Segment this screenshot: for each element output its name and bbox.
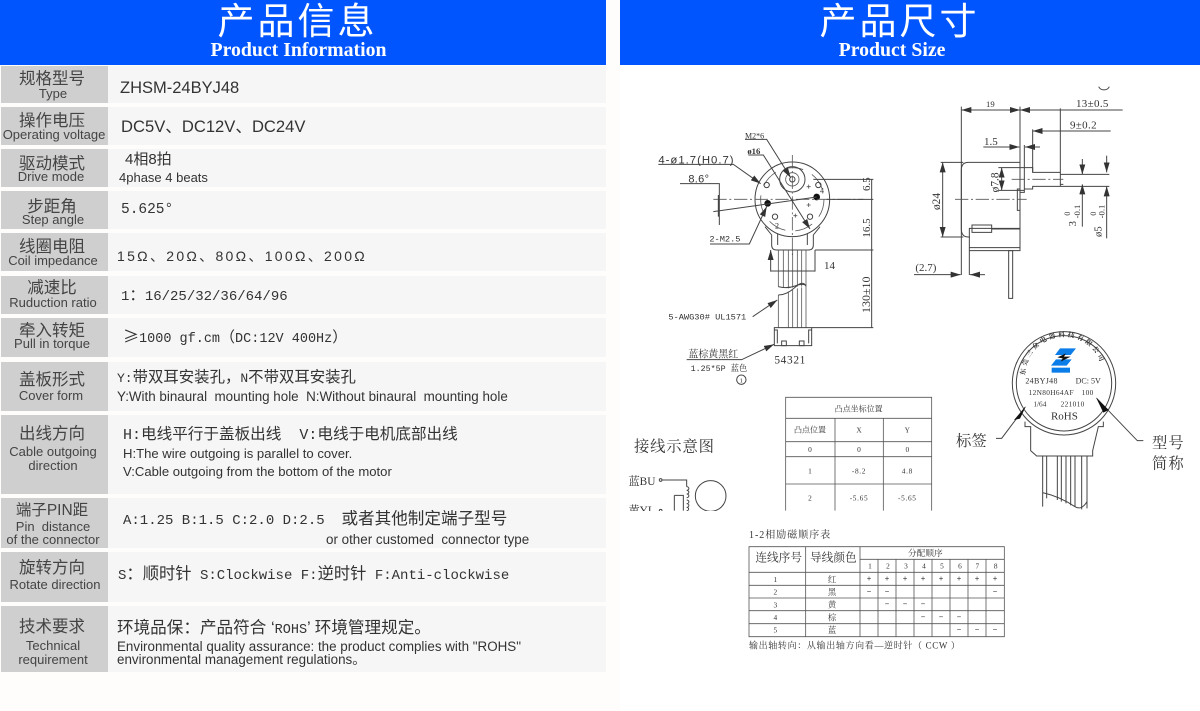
table: bump coordinates — [786, 397, 932, 511]
drawing: motor side view: 3 — [1068, 221, 1079, 226]
table: excitation sequence: − — [903, 600, 908, 609]
drawing: motor label view: 标签 — [956, 433, 987, 450]
value: cable outgoing direction: H:The wire outgoing is parallel to cover. — [123, 446, 352, 461]
drawing: motor label view: 简称 — [1152, 456, 1185, 473]
label: drive mode: 驱动模式 — [19, 155, 85, 173]
value: technical requirement: 环境品保：产品符合 ‘ROHS’ 环境管理规定。 — [117, 618, 431, 638]
table: excitation sequence: − — [975, 625, 980, 634]
labels: M2*6 — [745, 131, 764, 140]
label: pin distance — [1, 498, 108, 548]
table: excitation sequence: 黄 — [828, 600, 837, 610]
drawing: motor side view: ø24 — [931, 193, 943, 210]
drawing: motor front view: 54321 — [774, 354, 806, 366]
row: cable outgoing direction — [1, 415, 606, 494]
row: rotate direction — [1, 552, 606, 602]
heading: english size subtitle: Product Size — [839, 39, 945, 61]
label: cable outgoing direction — [1, 415, 108, 494]
table: excitation sequence: − — [939, 612, 944, 621]
row: pull in torque — [1, 318, 606, 357]
label: rotate direction: Rotate direction — [9, 577, 101, 592]
label: coil impedance — [1, 233, 108, 271]
table: excitation sequence: 1-2相励磁顺序表 — [749, 528, 831, 541]
table: excitation sequence: + — [921, 574, 926, 583]
table: excitation sequence: 5 — [940, 561, 944, 570]
drawing: motor front view: 1.25*5P 蓝色 — [691, 363, 747, 374]
table: excitation sequence: 黑 — [828, 588, 837, 597]
value: technical requirement: environmental management regulations。 — [117, 652, 366, 667]
label: drive mode: Drive mode — [18, 169, 84, 184]
table: bump coordinates: -5.65 — [850, 494, 868, 503]
label: technical requirement: requirement — [18, 652, 88, 667]
drawing: motor side view: ø5 — [1093, 226, 1104, 237]
table: excitation sequence: 2 — [886, 561, 890, 570]
drawing: motor side view: ø7.8 — [990, 172, 1002, 192]
drawing: motor label view: 型号 — [1152, 434, 1185, 452]
label: type: Type — [39, 86, 67, 101]
value: cable outgoing direction: H:电线平行于盖板出线 V:电线于电机底部出线 — [123, 422, 458, 444]
value: cable outgoing direction: V:Cable outgoing from the bottom of the motor — [123, 464, 392, 479]
table: excitation sequence: 红 — [828, 574, 837, 584]
label: cable outgoing direction: direction — [28, 458, 78, 473]
row: type — [1, 66, 606, 103]
value: pull in torque: ≥1000 gf.cm（DC:12V 400Hz） — [123, 323, 347, 347]
label: technical requirement: 技术要求 — [19, 618, 85, 636]
table: excitation sequence: 5 — [773, 626, 777, 635]
table: excitation sequence: − — [885, 600, 890, 609]
value: cover form: Y:With binaural mounting hole N:Without binaural mounting hole — [117, 389, 508, 404]
value: pin distance: or other customed connector type — [326, 532, 529, 547]
heading: english subtitle: Product Information — [210, 39, 386, 61]
drawing: motor side view: 13±0.5 — [1076, 98, 1109, 110]
drawing: motor side view: 1.5 — [984, 136, 998, 148]
drawing: motor label view: 东莞三众电器科技有限公司 — [1020, 331, 1104, 376]
label: technical requirement: Technical — [26, 638, 80, 653]
value: drive mode — [119, 151, 208, 185]
row: drive mode — [1, 149, 606, 187]
label: pin distance: Pin distance — [16, 519, 90, 534]
drawing: motor side view: 9±0.2 — [1070, 119, 1097, 131]
panel: product size drawings — [620, 65, 1200, 711]
value: reduction ratio: 1：16/25/32/36/64/96 — [121, 283, 288, 305]
table: excitation sequence: 7 — [975, 561, 979, 570]
value: rotate direction: S：顺时针 S:Clockwise F:逆时针 F:Anti-clockwise — [118, 560, 509, 584]
label: drive mode — [1, 149, 108, 187]
row: operating voltage — [1, 107, 606, 145]
dimension leaders — [658, 139, 873, 328]
drawing: motor label view: 1/64 — [1033, 400, 1047, 409]
table: bump coordinates: -5.65 — [898, 494, 917, 503]
row: coil impedance — [1, 233, 606, 271]
table: excitation sequence: + — [867, 574, 872, 583]
table: excitation sequence: 6 — [958, 561, 962, 570]
value: cover form: Y:带双耳安装孔，N不带双耳安装孔 — [117, 365, 356, 387]
table: excitation sequence — [749, 528, 1004, 650]
label: step angle: 步距角 — [27, 198, 77, 216]
row: step angle — [1, 191, 606, 229]
label: coil impedance: 线圈电阻 — [19, 238, 85, 256]
value: technical requirement — [117, 618, 521, 667]
label: reduction ratio: Ruduction ratio — [9, 295, 97, 310]
table: excitation sequence: + — [957, 574, 962, 583]
drawing: motor label view: 100 — [1082, 388, 1094, 397]
label: pull in torque: Pull in torque — [14, 336, 90, 351]
value: type: ZHSM-24BYJ48 — [120, 79, 239, 97]
drawing: motor label view — [956, 331, 1185, 510]
value: coil impedance: 15Ω、20Ω、80Ω、100Ω、200Ω — [117, 248, 367, 264]
table: excitation sequence: + — [939, 574, 944, 583]
table: excitation sequence: 导线颜色 — [810, 551, 857, 565]
drawing: wiring diagram: 蓝BU — [628, 474, 655, 488]
drawing: motor label view: 12N80H64AF — [1029, 388, 1074, 397]
label: operating voltage — [1, 107, 108, 145]
table: bump coordinates: 2 — [808, 494, 812, 503]
drawing: motor front view: 130±10 — [859, 276, 873, 313]
value: step angle: 5.625° — [121, 202, 173, 218]
drawing: motor label view: RoHS — [1051, 410, 1078, 422]
table: bump coordinates: 4.8 — [902, 466, 913, 475]
table: bump coordinates: 0 — [808, 445, 812, 454]
drawing: motor side view — [914, 87, 1123, 298]
drawing: motor front view: 2-M2.5 — [709, 235, 741, 245]
table: excitation sequence: 1 — [773, 575, 777, 584]
value: pin distance: A:1.25 B:1.5 C:2.0 D:2.5 或者其他制定端子型号 — [123, 505, 507, 529]
label: cover form: 盖板形式 — [19, 371, 85, 389]
table: excitation sequence: 4 — [773, 613, 777, 622]
label: cable outgoing direction: 出线方向 — [19, 425, 85, 443]
table: bump coordinates: Y — [905, 426, 911, 435]
table: excitation sequence: 连线序号 — [755, 551, 802, 565]
header: product information — [0, 0, 606, 65]
label: reduction ratio: 减速比 — [27, 279, 77, 297]
label: step angle: Step angle — [22, 212, 84, 227]
table: bump coordinates: 凸点位置 — [794, 425, 826, 435]
value: technical requirement: Environmental quality assurance: the product complies with "ROHS" — [117, 639, 521, 654]
drawing: motor label view: 221010 — [1061, 400, 1085, 409]
table: bump coordinates: -8.2 — [852, 466, 866, 475]
table: excitation sequence: 8 — [994, 561, 998, 570]
table: excitation sequence: 棕 — [828, 612, 837, 622]
value: drive mode: 4相8拍 — [125, 151, 172, 168]
table: excitation sequence: − — [885, 587, 890, 596]
label: technical requirement — [1, 606, 108, 672]
table: excitation sequence: 3 — [904, 561, 908, 570]
label: pull in torque: 牵入转矩 — [19, 322, 85, 340]
table: excitation sequence: − — [957, 625, 962, 634]
label: cable outgoing direction: Cable outgoing — [9, 444, 97, 459]
label: rotate direction: 旋转方向 — [19, 559, 85, 577]
value: cable outgoing direction — [123, 422, 458, 479]
label: pull in torque — [1, 318, 108, 357]
drawing: motor front view: 4-ø1.7(H0.7) — [658, 154, 735, 166]
label: cover form: Cover form — [19, 388, 83, 403]
table: excitation sequence: 输出轴转向：从输出轴方向看—逆时针（ CCW ） — [749, 639, 960, 650]
drawing: motor label view: 24BYJ48 — [1025, 376, 1058, 385]
table: excitation sequence: + — [975, 574, 980, 583]
drawing: wiring diagram: 接线示意图 — [634, 439, 715, 456]
drawing: motor front view: 14 — [824, 260, 835, 272]
label: step angle — [1, 191, 108, 229]
table: excitation sequence: 分配顺序 — [908, 547, 943, 558]
table: excitation sequence: − — [921, 612, 926, 621]
table: bump coordinates: 0 — [905, 445, 909, 454]
drawing: wiring diagram — [628, 439, 726, 517]
header: product size — [620, 0, 1200, 65]
label: operating voltage: Operating voltage — [3, 127, 105, 142]
drawing: motor front view — [658, 131, 873, 384]
label: type — [1, 66, 108, 103]
heading: chinese title: 产品信息 — [218, 1, 378, 42]
drawing: motor front view: 5-AWG30# UL1571 — [668, 312, 746, 322]
table: excitation sequence: − — [867, 587, 872, 596]
table: excitation sequence: − — [993, 625, 998, 634]
table: excitation sequence: − — [993, 587, 998, 596]
drawing: wiring diagram: 黄YL — [628, 503, 655, 517]
label: reduction ratio — [1, 276, 108, 314]
ribbon cable — [778, 250, 806, 328]
row: pin distance — [1, 498, 606, 548]
drawing: motor front view: 蓝棕黄黑红 — [688, 348, 738, 361]
table: bump coordinates: 1 — [808, 466, 812, 475]
table: excitation sequence: + — [885, 574, 890, 583]
drawing: motor side view: 0 — [1089, 212, 1098, 216]
table: excitation sequence: + — [993, 574, 998, 583]
value: drive mode: 4phase 4 beats — [119, 170, 208, 185]
heading: chinese size title: 产品尺寸 — [820, 1, 980, 42]
label: pin distance: 端子PIN距 — [16, 502, 88, 519]
drawing: motor front view: 2 — [775, 221, 779, 230]
row: reduction ratio — [1, 276, 606, 314]
table: bump coordinates: 凸点坐标位置 — [835, 404, 883, 414]
value: operating voltage: DC5V、DC12V、DC24V — [121, 117, 305, 136]
labels: 19 — [986, 99, 995, 109]
label: rotate direction — [1, 552, 108, 602]
value: pin distance — [123, 505, 529, 547]
label: type: 规格型号 — [19, 70, 85, 88]
row: technical requirement — [1, 606, 606, 672]
drawing: motor side view: -0.1 — [1072, 205, 1082, 218]
table: excitation sequence: 蓝 — [828, 625, 836, 635]
drawing: motor side view: -0.1 — [1097, 205, 1107, 218]
drawing: motor front view: 1 — [740, 377, 743, 384]
label: coil impedance: Coil impedance — [8, 253, 98, 268]
table: excitation sequence: − — [921, 600, 926, 609]
label: operating voltage: 操作电压 — [19, 112, 85, 130]
table: excitation sequence: − — [957, 612, 962, 621]
table: bump coordinates: 0 — [857, 445, 861, 454]
table: excitation sequence: 3 — [773, 600, 777, 609]
icon: company logo — [1051, 348, 1076, 373]
value: cover form — [117, 365, 508, 404]
drawing: motor front view: ø16 — [747, 146, 761, 156]
drawing: motor front view: 16.5 — [861, 218, 873, 238]
label: cover form — [1, 362, 108, 411]
table: excitation sequence: 1 — [868, 561, 872, 570]
drawing: motor label view: DC: 5V — [1076, 376, 1101, 385]
drawing: motor front view: 8.6° — [688, 173, 709, 185]
table: excitation sequence: 4 — [922, 561, 926, 570]
row: cover form — [1, 362, 606, 411]
table: excitation sequence: 2 — [773, 588, 777, 597]
drawing: motor side view: 0 — [1063, 212, 1072, 216]
table: bump coordinates: X — [856, 426, 862, 435]
drawing: motor front view: 4 — [820, 186, 824, 195]
connector — [774, 328, 812, 346]
table: excitation sequence: + — [903, 574, 908, 583]
drawing: motor front view: 6.5 — [861, 177, 873, 191]
drawing: motor side view: (2.7) — [915, 262, 937, 274]
label: pin distance: of the connector — [6, 532, 100, 547]
